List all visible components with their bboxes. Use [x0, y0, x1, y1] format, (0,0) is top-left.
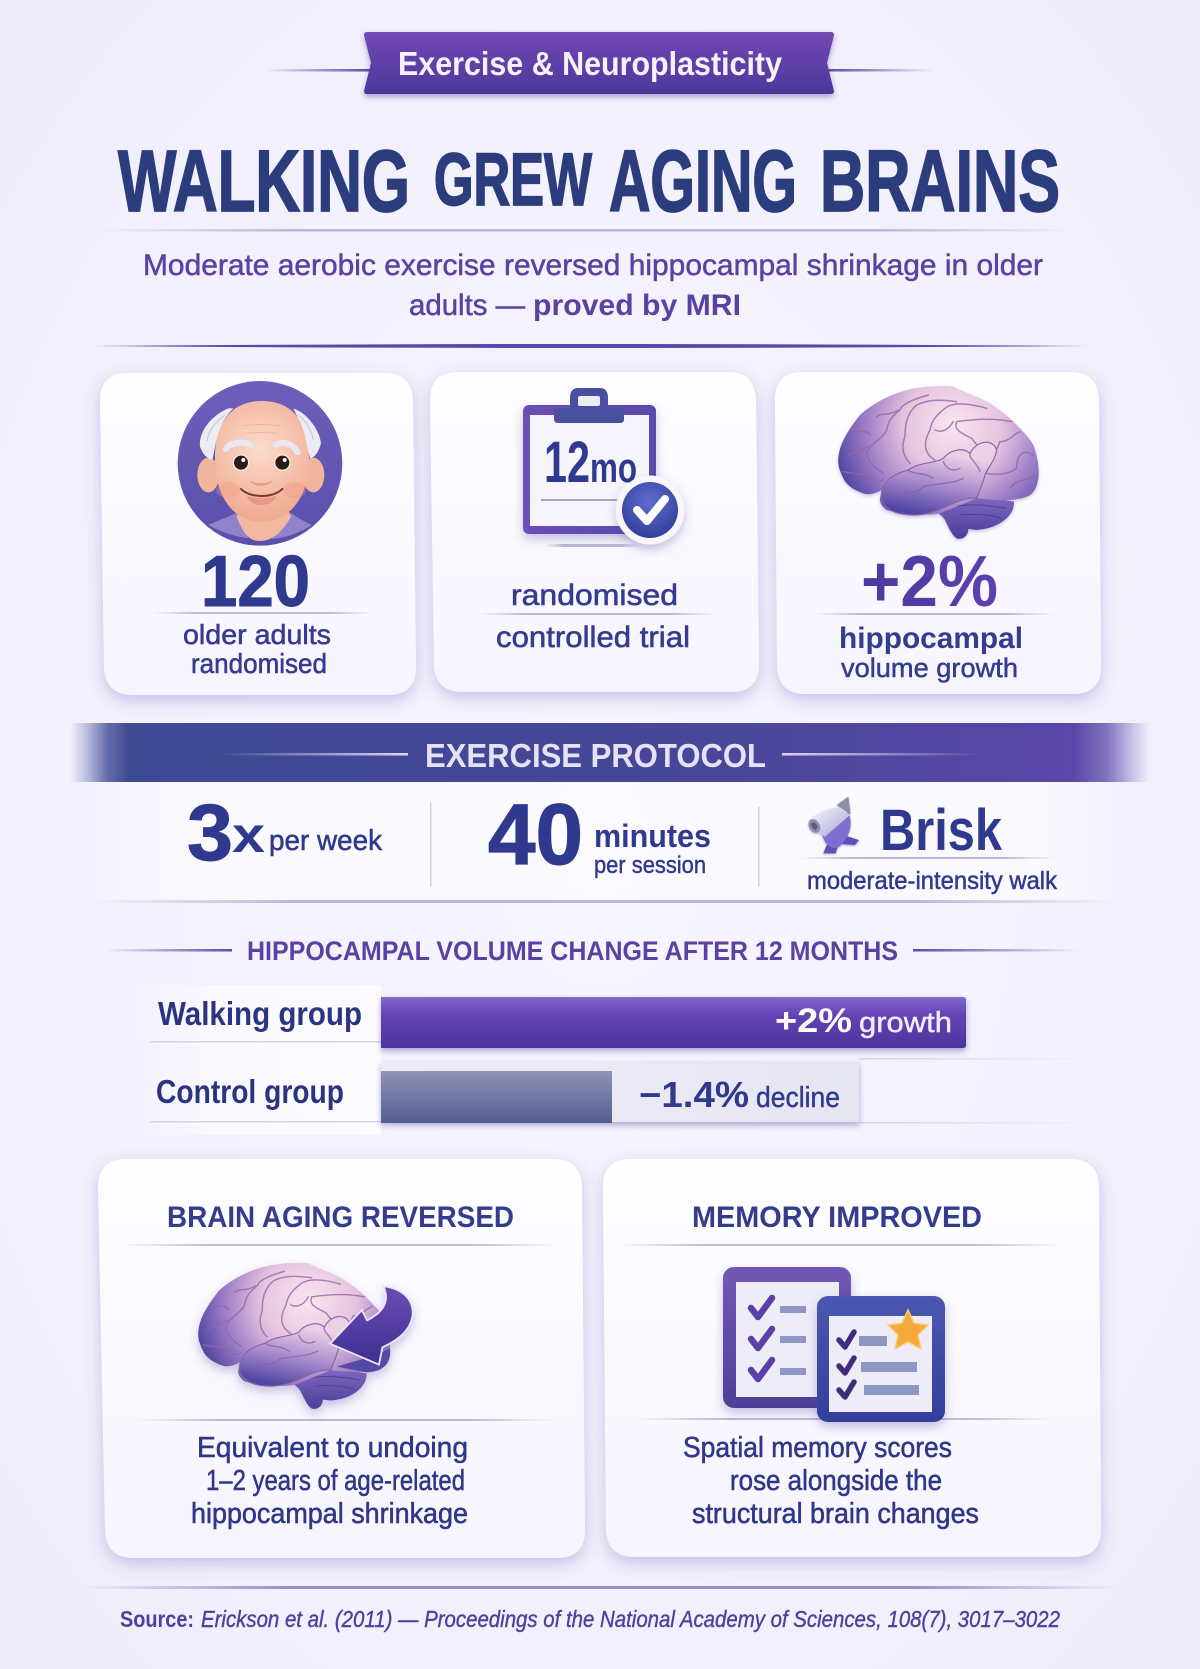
icon: older adult avatar [178, 381, 342, 546]
stat: Brisk moderate-intensity walk [807, 798, 1057, 895]
bar: control group -1.4% decline [381, 1062, 859, 1123]
subtitle [143, 249, 1043, 322]
stat: 3x per week: x [232, 807, 265, 863]
body text: Spatial memory scores [683, 1432, 952, 1464]
title: GREW [434, 138, 592, 221]
bar: walking group +2% growth [381, 997, 966, 1048]
banner: exercise protocol: EXERCISE PROTOCOL [425, 737, 766, 774]
stat: 40 minutes per session: 40 [488, 787, 583, 883]
stat: 3x per week: per week [269, 825, 382, 857]
body text [683, 1432, 979, 1530]
label: walking group: Walking group [158, 995, 362, 1032]
bar: control group -1.4% decline: −1.4% [639, 1074, 749, 1115]
panel: brain aging reversed [98, 1159, 585, 1558]
panel: memory improved [603, 1159, 1101, 1557]
label: randomised controlled trial: controlled trial [496, 621, 690, 654]
icon: clipboard with check: 12 [544, 430, 590, 495]
subtitle: proved by MRI [533, 289, 741, 322]
source citation: Source: [120, 1606, 194, 1632]
panel: participants [100, 373, 416, 695]
label: older adults randomised: older adults [183, 619, 331, 650]
icon: clipboard with check: mo [590, 444, 637, 491]
label: hippocampal volume growth [839, 622, 1023, 683]
icon: walking shoe [806, 797, 859, 853]
banner: exercise protocol [70, 723, 1150, 782]
stat: 3x per week: 3 [187, 788, 233, 877]
panel: study design [430, 372, 759, 692]
stat: Brisk moderate-intensity walk: Brisk [880, 798, 1003, 863]
label: older adults randomised: randomised [191, 648, 327, 679]
label: randomised controlled trial [496, 579, 690, 654]
bar: walking group +2% growth: growth [859, 1007, 952, 1039]
body text: Equivalent to undoing [197, 1432, 468, 1464]
stat: 3x per week [187, 788, 382, 877]
source citation: Erickson et al. (2011) — Proceedings of the National Academy of Sciences, 108(7), 3017–3022 [201, 1606, 1060, 1632]
panel: volume growth [775, 372, 1101, 694]
panel: protocol stats [90, 782, 1120, 900]
body text [191, 1432, 468, 1530]
body text: rose alongside the [730, 1465, 942, 1497]
stat: 40 minutes per session: per session [594, 852, 706, 879]
stat: +2%: +2% [861, 542, 998, 622]
stat: Brisk moderate-intensity walk: moderate-intensity walk [807, 867, 1057, 895]
bar chart [135, 985, 1093, 1135]
body text: hippocampal shrinkage [191, 1498, 468, 1530]
heading: BRAIN AGING REVERSED [167, 1201, 514, 1234]
subtitle: Moderate aerobic exercise reversed hippocampal shrinkage in older [143, 249, 1043, 282]
title: AGING [609, 133, 797, 230]
body text: 1–2 years of age-related [206, 1465, 465, 1497]
icon: memory score sheets [723, 1267, 945, 1422]
title: BRAINS [820, 133, 1060, 230]
stat: 120: 120 [201, 542, 310, 622]
title [118, 133, 1060, 230]
header ribbon badge [265, 32, 933, 94]
icon: clipboard with check [523, 388, 684, 547]
label: older adults randomised [183, 619, 331, 679]
header ribbon badge: Exercise & Neuroplasticity [398, 45, 783, 82]
subtitle: adults — [409, 289, 525, 322]
bar: control group -1.4% decline: decline [756, 1082, 840, 1114]
heading: chart title: HIPPOCAMPAL VOLUME CHANGE AFTER 12 MONTHS [247, 936, 898, 966]
icon: brain [838, 386, 1039, 539]
icon: brain with reversal arrow [198, 1263, 412, 1409]
label: randomised controlled trial: randomised [511, 579, 678, 612]
stat: 40 minutes per session: minutes [594, 818, 711, 854]
heading: MEMORY IMPROVED [692, 1201, 982, 1234]
stat: 40 minutes per session [488, 787, 711, 883]
label: control group: Control group [156, 1073, 344, 1110]
label: hippocampal volume growth: hippocampal [839, 622, 1023, 655]
title: WALKING [118, 133, 410, 230]
label: hippocampal volume growth: volume growth [841, 653, 1018, 683]
bar: walking group +2% growth: +2% [775, 1002, 852, 1040]
body text: structural brain changes [692, 1498, 979, 1530]
